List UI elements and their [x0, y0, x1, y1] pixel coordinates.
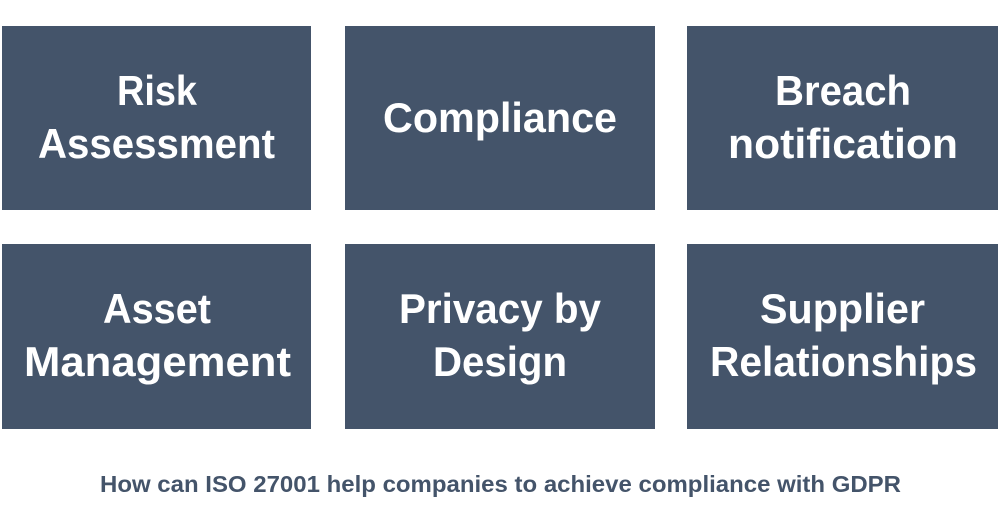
- panel: Breach notification: [687, 26, 998, 210]
- panel: Compliance: Compliance: [383, 94, 617, 141]
- panel: Supplier Relationships: Supplier: [760, 285, 925, 332]
- panel: Breach notification: notification: [728, 120, 958, 167]
- caption: How can ISO 27001 help companies to achieve compliance with GDPR: [100, 471, 901, 497]
- panel: Asset Management: Asset: [103, 285, 211, 332]
- panel: Privacy by Design: [345, 244, 655, 429]
- panel: Asset Management: [2, 244, 311, 429]
- panel: Supplier Relationships: Relationships: [710, 338, 977, 385]
- panel: Privacy by Design: Privacy by: [399, 285, 602, 332]
- panel: Risk Assessment: Risk: [117, 67, 198, 114]
- panel: Compliance: [345, 26, 655, 210]
- panel: Breach notification: Breach: [775, 67, 911, 114]
- panel: Risk Assessment: [2, 26, 311, 210]
- panel: Asset Management: Management: [24, 338, 291, 385]
- panel: Privacy by Design: Design: [433, 338, 567, 385]
- panel: Risk Assessment: Assessment: [38, 120, 275, 167]
- panel: Supplier Relationships: [687, 244, 998, 429]
